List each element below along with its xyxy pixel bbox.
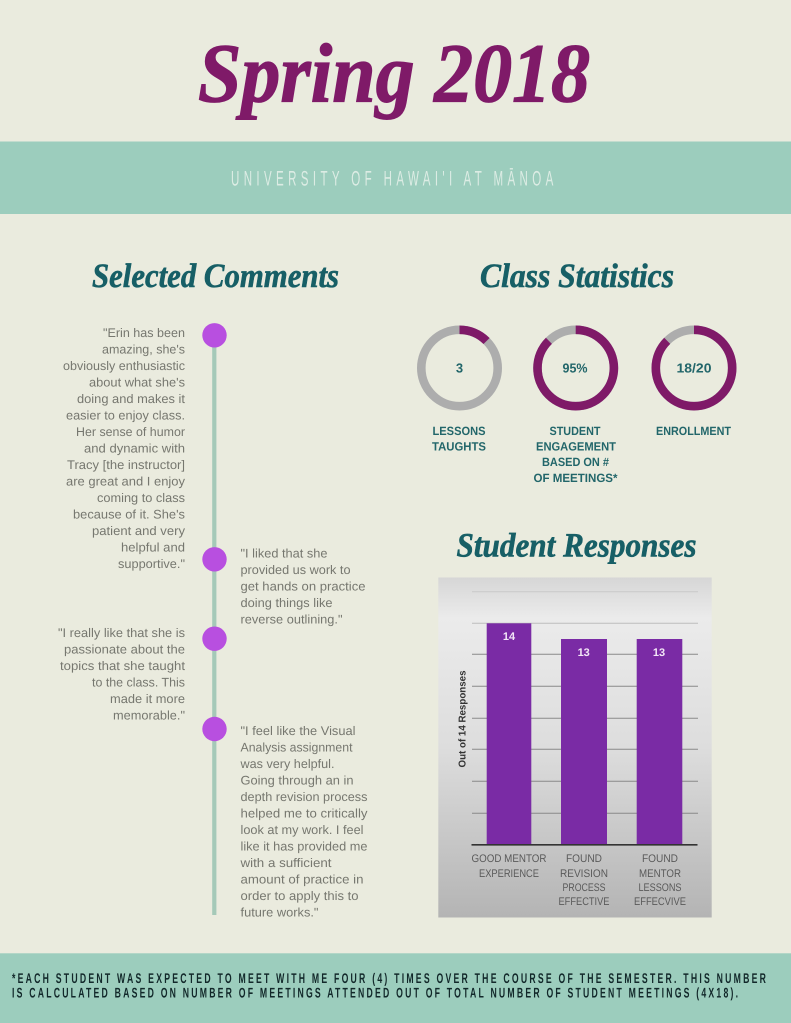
comment 3: topics that she taught bbox=[60, 659, 186, 673]
timeline dot 4 bbox=[202, 717, 227, 741]
stat: lessons taught: 3 bbox=[456, 360, 463, 376]
category label 1: GOOD MENTOR bbox=[472, 853, 547, 865]
comment 4 bbox=[239, 724, 368, 920]
comment 1: about what she's bbox=[89, 376, 185, 390]
stat: enrollment: ENROLLMENT bbox=[656, 424, 732, 438]
stat: lessons taught: LESSONS bbox=[432, 424, 486, 438]
stat: student engagement: ENGAGEMENT bbox=[536, 440, 617, 454]
heading: selected comments: Selected Comments bbox=[92, 258, 339, 295]
bar: found mentor lessons effective bbox=[637, 639, 682, 845]
header band bbox=[0, 142, 791, 214]
comment 4: depth revision process bbox=[240, 790, 368, 804]
comment 1: helpful and bbox=[121, 540, 185, 554]
comment 1: coming to class bbox=[97, 491, 185, 505]
stat: lessons taught bbox=[421, 330, 498, 454]
category label 2 bbox=[558, 853, 610, 908]
comment 1: Tracy [the instructor] bbox=[67, 458, 185, 472]
footnote: *EACH STUDENT WAS EXPECTED TO MEET WITH ME FOUR (4) TIMES OVER THE COURSE OF THE SEMESTER. THIS NUMBER bbox=[12, 970, 766, 986]
comment 4: future works." bbox=[240, 906, 318, 920]
bar: found revision process effective bbox=[561, 639, 607, 845]
comment 2: get hands on practice bbox=[240, 580, 366, 594]
stat: lessons taught: TAUGHTS bbox=[432, 440, 486, 454]
category label 3: EFFECVIVE bbox=[634, 896, 686, 908]
comment 4: look at my work. I feel bbox=[240, 823, 364, 837]
comment 4: was very helpful. bbox=[239, 757, 334, 771]
comment 1: "Erin has been bbox=[103, 326, 185, 340]
comment 1: amazing, she's bbox=[102, 342, 185, 356]
comment 3: passionate about the bbox=[64, 642, 185, 656]
category label 2: REVISION bbox=[560, 868, 608, 880]
category label 3 bbox=[634, 853, 686, 908]
stat: student engagement: OF MEETINGS* bbox=[534, 471, 618, 485]
comment 4: Analysis assignment bbox=[240, 740, 353, 754]
category label 2: EFFECTIVE bbox=[558, 896, 610, 908]
timeline dot 2 bbox=[202, 547, 227, 572]
footnote bbox=[12, 970, 766, 1000]
comment 4: helped me to critically bbox=[240, 806, 368, 820]
comment 2: provided us work to bbox=[240, 563, 351, 577]
title: Spring 2018 bbox=[198, 28, 590, 120]
footnote: IS CALCULATED BASED ON NUMBER OF MEETINGS ATTENDED OUT OF TOTAL NUMBER OF STUDENT MEETINGS (4X18). bbox=[12, 984, 738, 1000]
timeline bbox=[202, 323, 227, 915]
comment 3: to the class. This bbox=[92, 676, 185, 690]
y axis title: Out of 14 Responses bbox=[458, 670, 468, 768]
comment 2 bbox=[240, 546, 366, 626]
comment 3: made it more bbox=[110, 692, 185, 706]
comment 3: "I really like that she is bbox=[58, 626, 185, 640]
comment 3 bbox=[58, 626, 186, 722]
footer band bbox=[0, 953, 791, 1023]
stat: student engagement: 95% bbox=[562, 360, 588, 376]
category label 3: FOUND bbox=[642, 853, 678, 865]
comment 3: memorable." bbox=[113, 708, 185, 722]
comment 1: Her sense of humor bbox=[76, 425, 185, 439]
category label 1: EXPERIENCE bbox=[479, 868, 539, 880]
comment 4: Going through an in bbox=[240, 774, 354, 788]
comment 1: are great and I enjoy bbox=[66, 474, 186, 488]
comment 2: doing things like bbox=[240, 596, 333, 610]
subtitle: UNIVERSITY OF HAWAI'I AT MĀNOA bbox=[231, 168, 553, 190]
comment 4: "I feel like the Visual bbox=[240, 724, 356, 738]
comment 4: with a sufficient bbox=[239, 856, 332, 870]
comment 4: order to apply this to bbox=[240, 889, 359, 903]
category label 1 bbox=[472, 853, 547, 880]
heading: student responses: Student Responses bbox=[456, 528, 696, 564]
category label 2: FOUND bbox=[566, 853, 602, 865]
stat: student engagement bbox=[534, 330, 618, 485]
stat: student engagement: STUDENT bbox=[550, 424, 601, 438]
comment 2: reverse outlining." bbox=[240, 612, 342, 626]
comment 1: patient and very bbox=[92, 524, 186, 538]
stat: enrollment bbox=[656, 330, 732, 438]
heading: class statistics: Class Statistics bbox=[480, 258, 674, 295]
comment 1: because of it. She's bbox=[73, 508, 185, 522]
category label 3: LESSONS bbox=[638, 882, 682, 894]
comment 1: obviously enthusiastic bbox=[63, 359, 185, 373]
bar: good mentor experience bbox=[487, 623, 531, 845]
comment 1 bbox=[63, 326, 186, 571]
stat: student engagement: BASED ON # bbox=[542, 455, 609, 469]
comment 2: "I liked that she bbox=[240, 546, 328, 560]
bar: found mentor lessons effective: 13 bbox=[653, 647, 665, 659]
comment 1: doing and makes it bbox=[77, 392, 186, 406]
category label 3: MENTOR bbox=[639, 868, 681, 880]
bar chart: student responses bbox=[438, 578, 712, 918]
comment 4: amount of practice in bbox=[240, 872, 364, 886]
timeline dot 1 bbox=[202, 323, 227, 347]
stat: enrollment: 18/20 bbox=[676, 360, 712, 376]
timeline dot 3 bbox=[202, 626, 227, 651]
comment 1: easier to enjoy class. bbox=[66, 408, 185, 422]
comment 4: like it has provided me bbox=[240, 840, 368, 854]
comment 1: and dynamic with bbox=[84, 442, 185, 456]
category label 2: PROCESS bbox=[562, 882, 606, 894]
comment 1: supportive." bbox=[118, 557, 185, 571]
bar: found revision process effective: 13 bbox=[578, 647, 590, 659]
bar: good mentor experience: 14 bbox=[503, 631, 516, 643]
